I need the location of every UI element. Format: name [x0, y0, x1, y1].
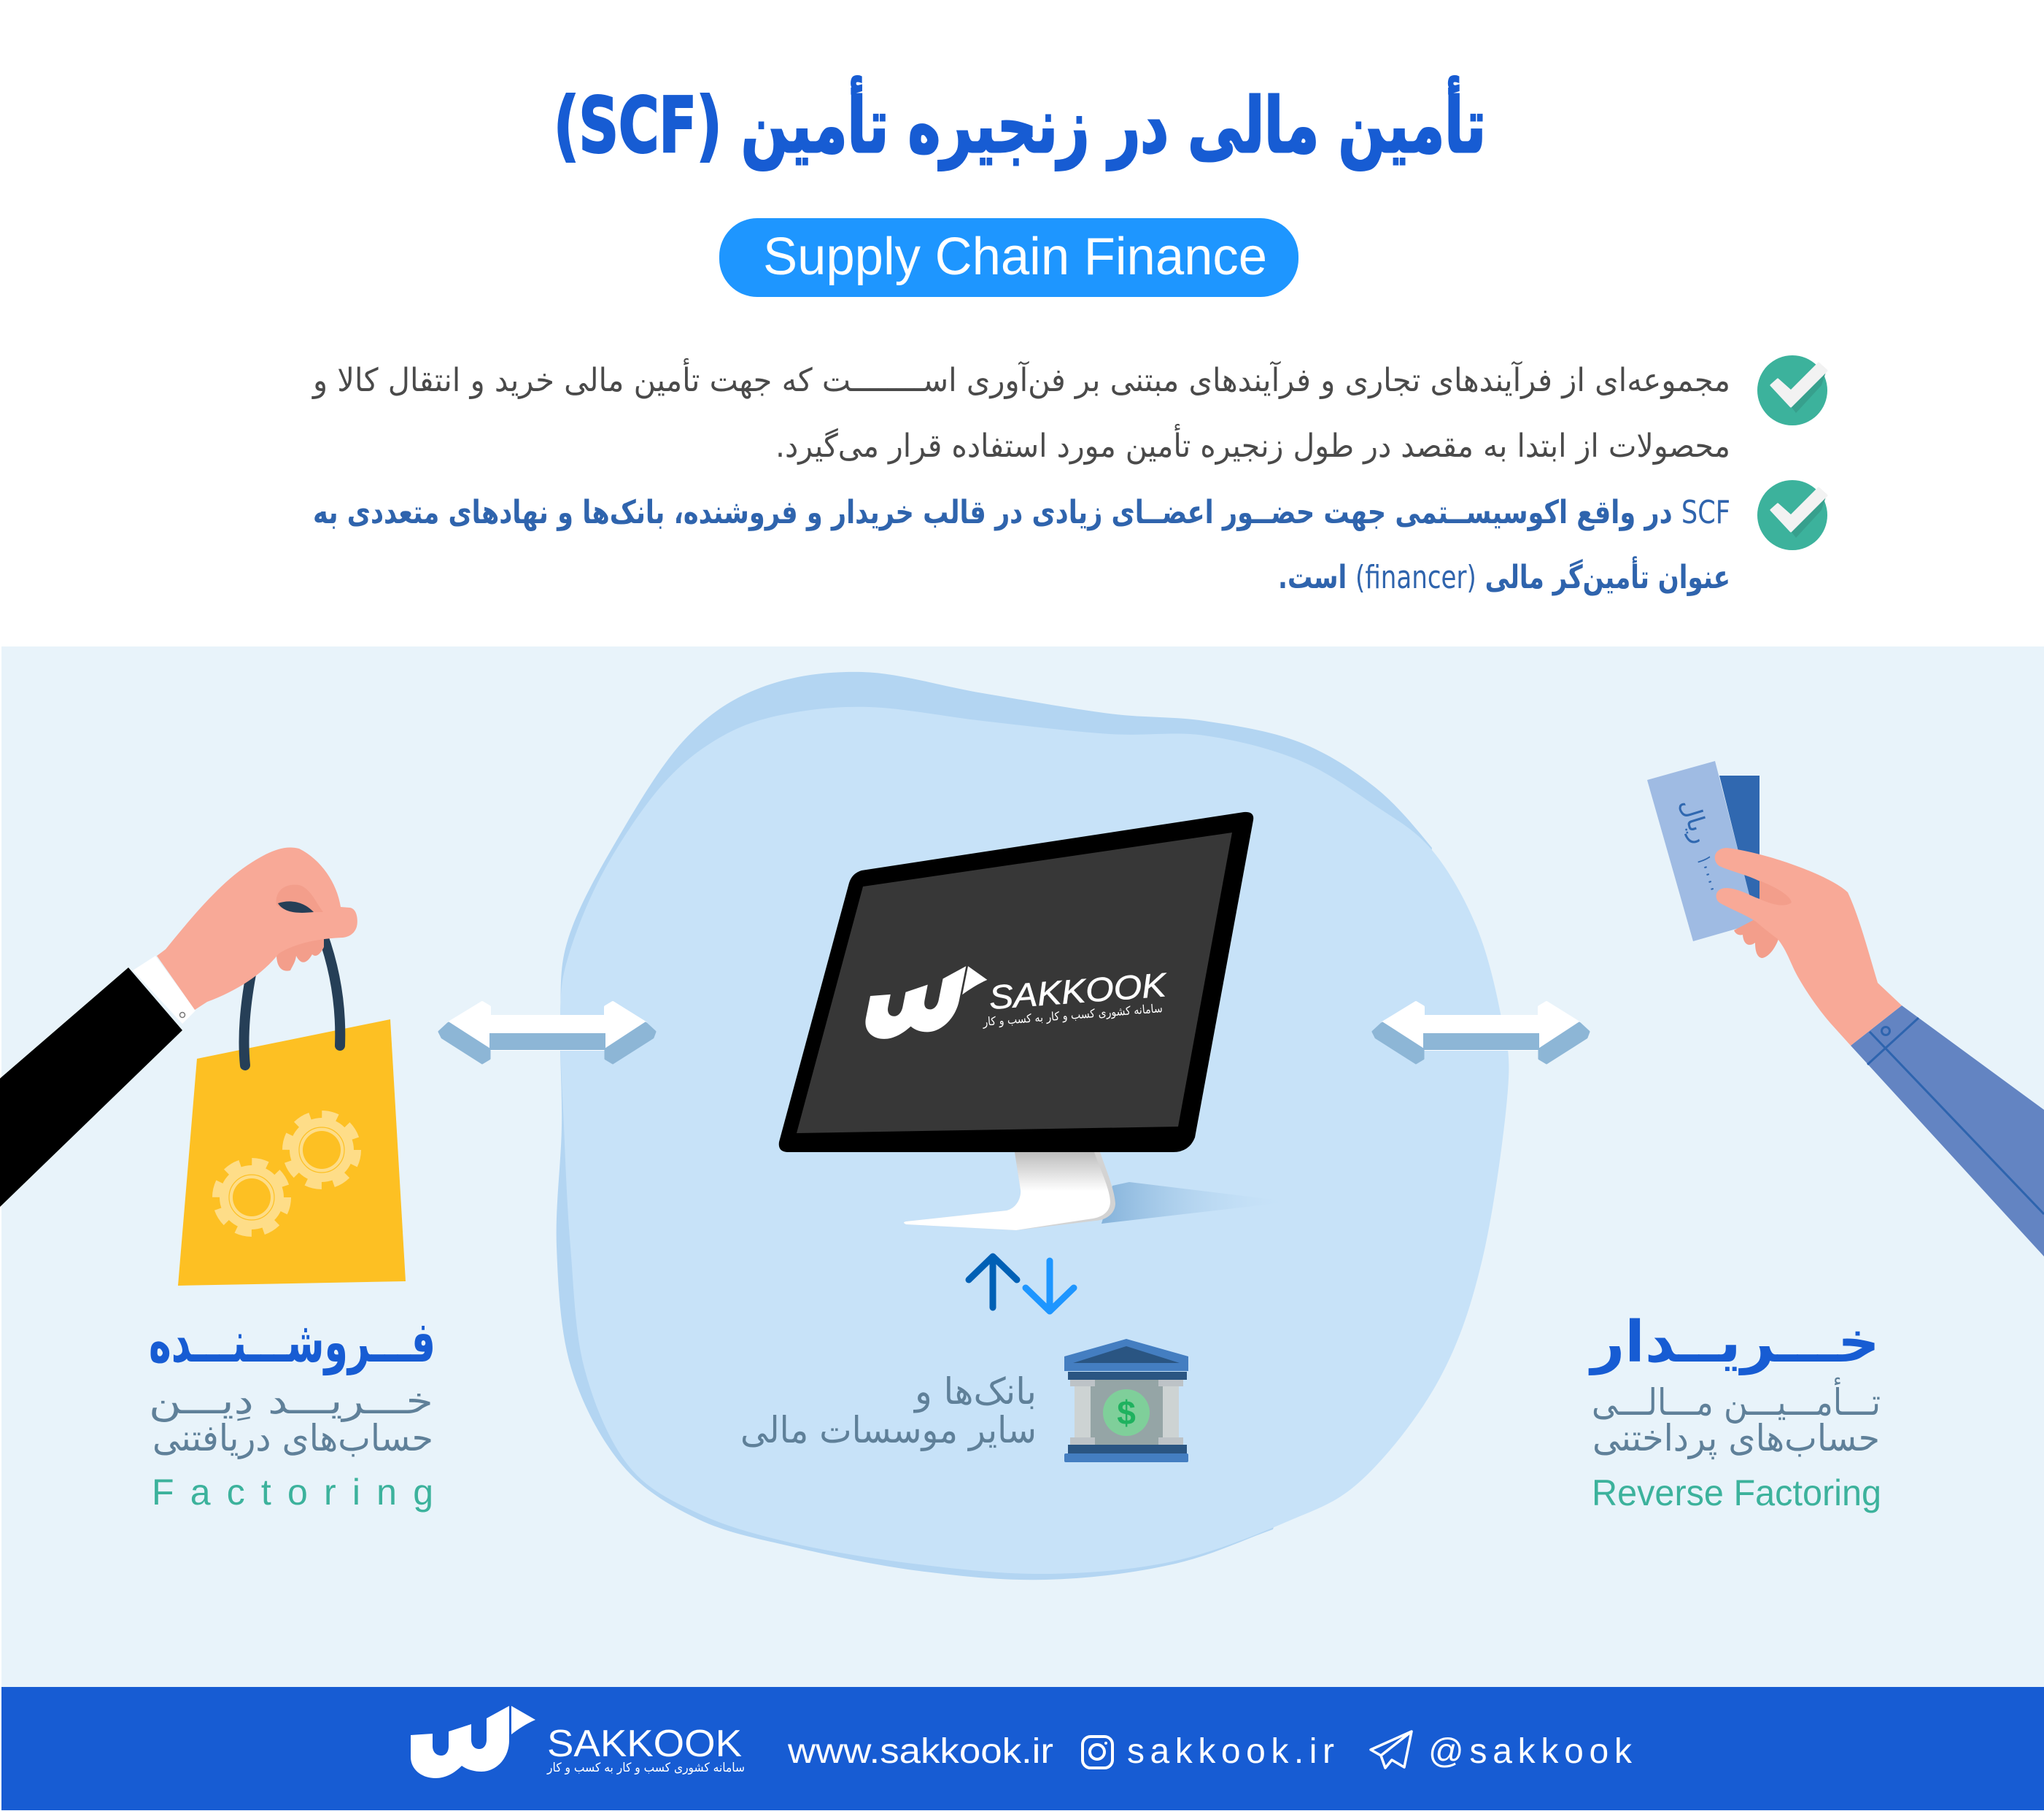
shirt cuff [133, 956, 196, 1024]
text: banks label: بانک‌ها و [913, 1370, 1037, 1413]
thumb shadow [276, 885, 323, 912]
cuff button [179, 1013, 185, 1017]
buyer term: Reverse Factoring [1592, 1472, 1881, 1513]
illustration: seller hand with bag [0, 848, 406, 1286]
seller term: Factoring [152, 1472, 433, 1513]
arrow: right double [1373, 1003, 1589, 1063]
footer website: www.sakkook.ir [787, 1732, 1053, 1771]
icon: instagram [1083, 1737, 1112, 1768]
text: highlighted line 3: SCF در واقع اکوسیســتمی جهت حضــور اعضــای زیادی در قالب خریدار و فروشنده، بانک‌ها و نهادهای متعددی به [313, 494, 1730, 531]
bag handles [244, 934, 340, 1065]
banknote [1647, 761, 1757, 941]
blob: inner [560, 707, 1509, 1574]
seller line 2: حساب‌های دریافتنی [152, 1417, 433, 1459]
footer tagline: سامانه کشوری کسب و کار به کسب و کار [546, 1761, 745, 1775]
monitor tagline: سامانه کشوری کسب و کار به کسب و کار [982, 1001, 1163, 1030]
subtitle pill [719, 218, 1298, 297]
handle through fingers [278, 901, 314, 913]
icon: gear large [287, 1116, 356, 1184]
sleeve seams [1867, 1018, 2044, 1214]
banknote amount: ریال [1674, 795, 1716, 847]
text: description line 1: مجموعه‌ای از فرآیندهای تجاری و فرآیندهای مبتنی بر فن‌آوری اســــــــت که جهت تأمین مالی خرید و انتقال کالا و [311, 358, 1730, 399]
arrow: down [1026, 1261, 1074, 1311]
buyer line 1: تـــأمـــیـــن مـــالـــی [1592, 1377, 1881, 1424]
footer brand name: SAKKOOK [547, 1723, 742, 1765]
text: banks label: سایر موسسات مالی [740, 1409, 1037, 1451]
monitor logo [862, 966, 990, 1039]
finger shade [1760, 881, 1792, 906]
monitor bezel [779, 812, 1253, 1152]
banknote amount [1674, 795, 1726, 896]
icon: bank: $ [1117, 1394, 1136, 1432]
title: تأمین مالی در زنجیره تأمین (SCF) [554, 76, 1486, 170]
footer telegram handle: @sakkook [1428, 1732, 1633, 1771]
icon: bank [1064, 1339, 1188, 1462]
icon: telegram [1371, 1731, 1412, 1768]
back fingers [276, 934, 324, 971]
monitor brand name: SAKKOOK [988, 965, 1169, 1016]
icon: gear small [217, 1163, 286, 1232]
hand [1715, 848, 1902, 1046]
dark card [1719, 776, 1760, 901]
illustration: buyer hand with banknote [1647, 761, 2044, 1256]
banknote amount: ۱۰۰۰۰ [1692, 852, 1726, 896]
footer instagram handle: sakkook.ir [1127, 1732, 1334, 1771]
text: description line 2: محصولات از ابتدا به مقصد در طول زنجیره تأمین مورد استفاده قرار می‌گیرد. [775, 423, 1730, 465]
sleeve [1851, 1005, 2044, 1256]
seller line 1: خـــریـــد دِیـــن [149, 1380, 433, 1422]
blob: outer [557, 672, 1432, 1580]
buyer heading: خـــریــدار [1588, 1310, 1880, 1375]
buyer line 2: حساب‌های پرداختنی [1592, 1417, 1880, 1459]
seller heading: فـــروشـــنـــده [149, 1310, 435, 1375]
text block: seller [149, 1310, 435, 1513]
shopping bag [178, 1019, 406, 1286]
icon: check 1 [1757, 355, 1827, 425]
icon: check 2 [1757, 480, 1827, 550]
subtitle pill: Supply Chain Finance [763, 228, 1267, 286]
text: banks label [740, 1370, 1037, 1451]
panel: diagram background [1, 646, 2044, 1687]
text: highlighted line 4: عنوان تأمین‌گر مالی (financer) است. [1278, 556, 1730, 596]
footer logo mark [411, 1706, 535, 1778]
black sleeve [0, 968, 182, 1207]
monitor shadow [1102, 1182, 1291, 1224]
monitor stand [904, 1152, 1115, 1230]
sleeve button [1882, 1027, 1889, 1035]
illustration: monitor [779, 812, 1291, 1230]
arrow: up [969, 1256, 1017, 1308]
hand [157, 848, 357, 1010]
text block: buyer [1588, 1310, 1881, 1513]
arrow: left double [439, 1003, 655, 1063]
footer bar [1, 1687, 2044, 1810]
monitor screen [797, 833, 1232, 1133]
back fingers [1734, 916, 1778, 958]
